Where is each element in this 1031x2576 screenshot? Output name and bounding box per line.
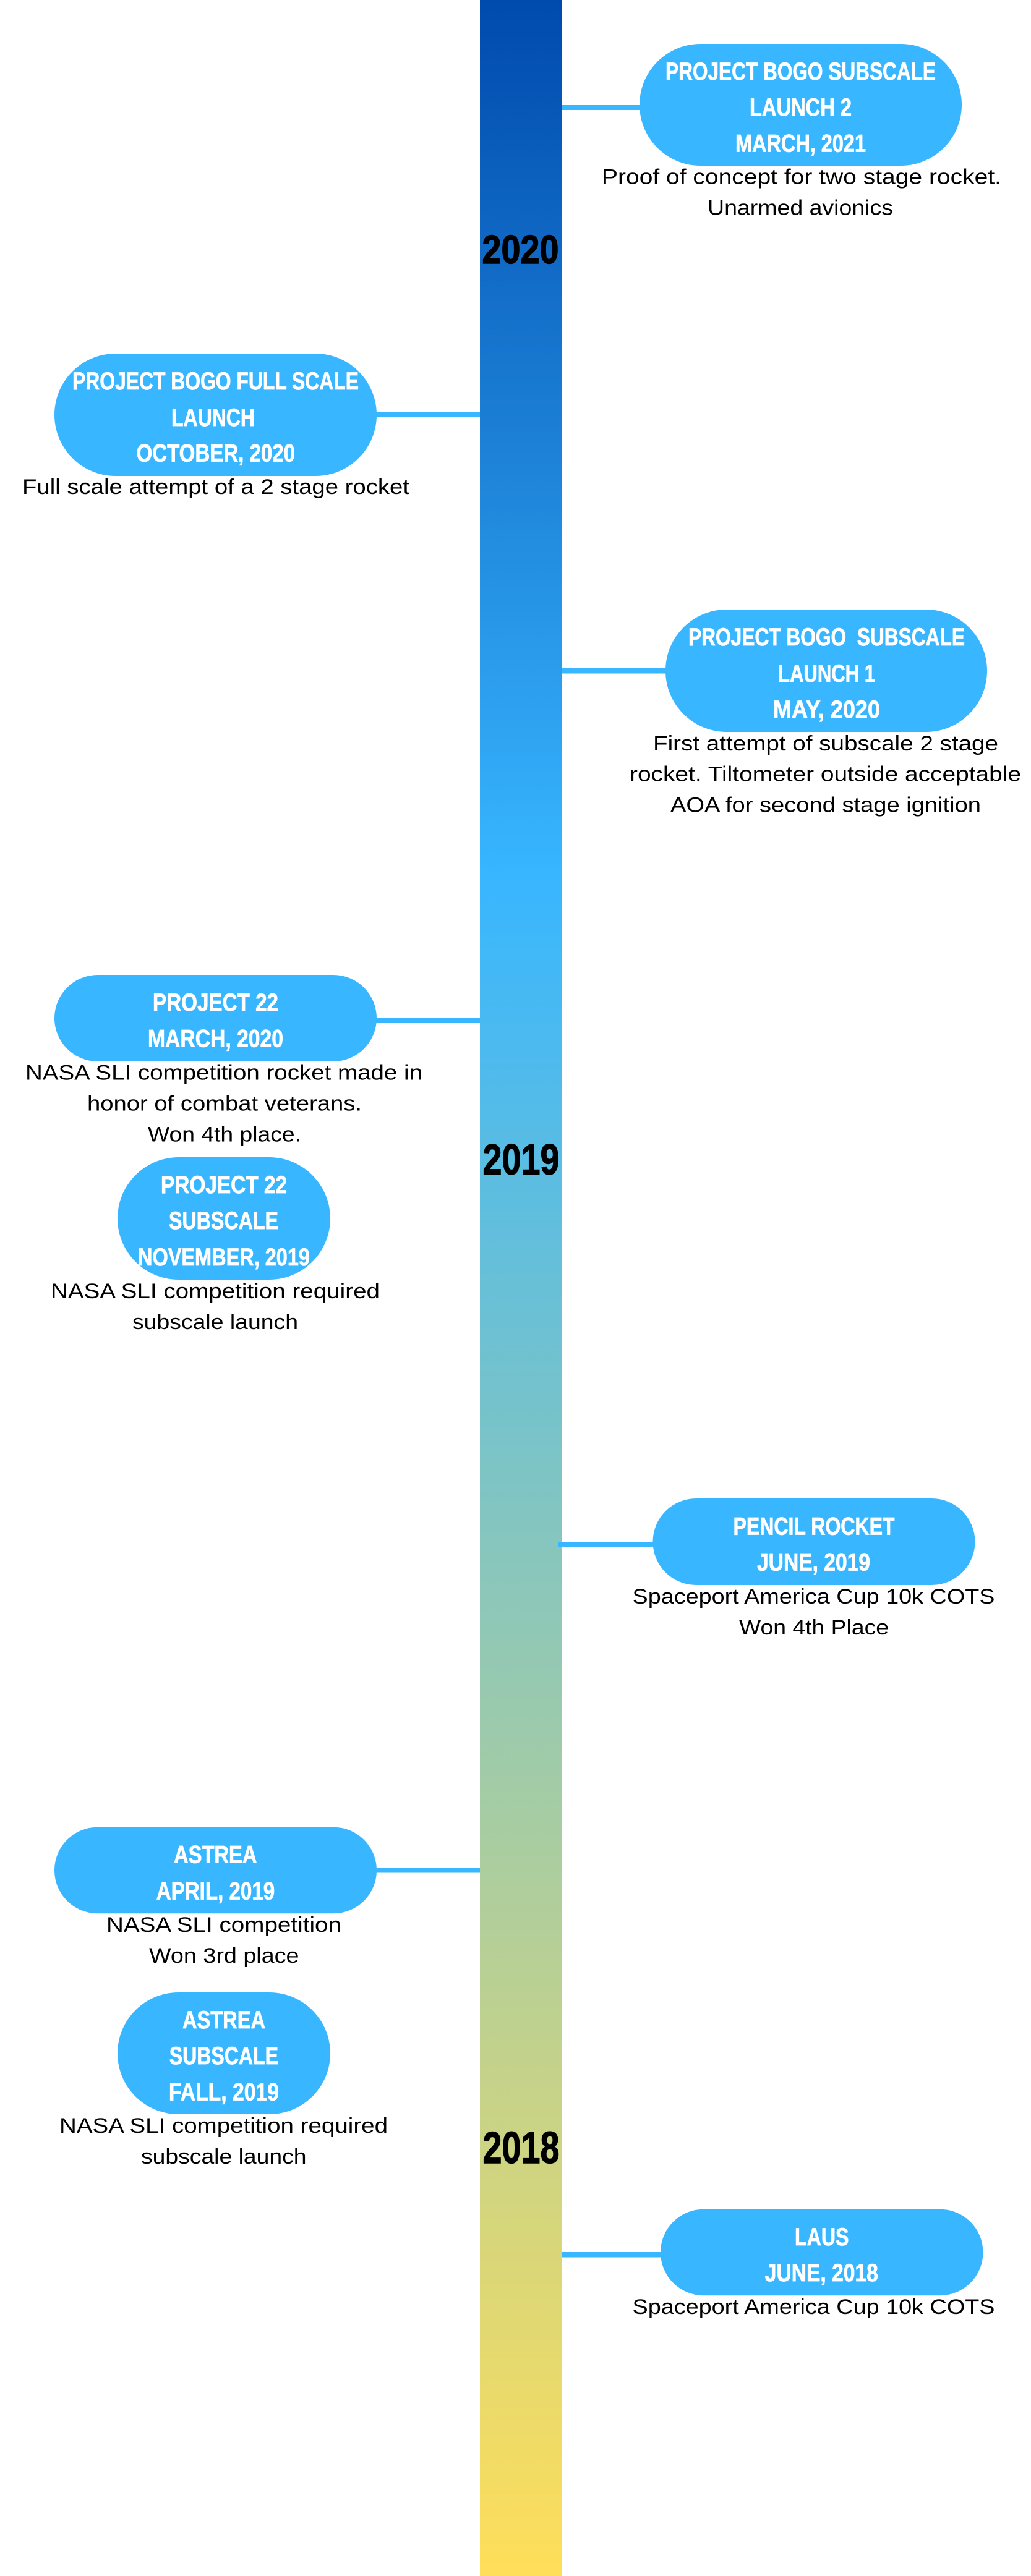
pill bbox=[653, 1498, 975, 1585]
milestone: Astrea Subscale bbox=[59, 1992, 388, 2169]
milestone: Project Bogo Subscale Launch 1 bbox=[562, 610, 1021, 817]
description: honor of combat veterans. bbox=[87, 1092, 362, 1115]
year label 2019: 2019 bbox=[482, 1135, 559, 1183]
year label 2018: 2018 bbox=[482, 2123, 559, 2173]
milestone: Pencil Rocket bbox=[558, 1498, 995, 1639]
pill title: LAUNCH 1 bbox=[778, 660, 875, 687]
pill bbox=[54, 354, 377, 476]
milestone: Project 22 Subscale bbox=[51, 1157, 380, 1334]
description: AOA for second stage ignition bbox=[670, 794, 981, 817]
description bbox=[106, 1913, 341, 1968]
connector bbox=[562, 668, 667, 674]
description: Proof of concept for two stage rocket. bbox=[602, 166, 1001, 189]
description: rocket. Tiltometer outside acceptable bbox=[630, 763, 1021, 786]
description: First attempt of subscale 2 stage bbox=[653, 732, 998, 755]
pill title: JUNE, 2019 bbox=[757, 1549, 870, 1576]
description: NASA SLI competition bbox=[106, 1913, 341, 1937]
description: subscale launch bbox=[141, 2145, 307, 2169]
description: NASA SLI competition required bbox=[51, 1280, 380, 1303]
connector bbox=[375, 1868, 480, 1873]
pill title bbox=[765, 2224, 878, 2287]
pill title: FALL, 2019 bbox=[169, 2079, 279, 2106]
description bbox=[632, 1585, 995, 1639]
description: Won 4th Place bbox=[739, 1616, 889, 1639]
pill title bbox=[138, 1171, 310, 1271]
pill title bbox=[148, 989, 283, 1053]
pill title bbox=[734, 1513, 894, 1576]
pill title bbox=[169, 2007, 279, 2106]
description bbox=[51, 1280, 380, 1334]
connector bbox=[562, 105, 641, 110]
pill title: PROJECT 22 bbox=[161, 1171, 287, 1199]
pill title: SUBSCALE bbox=[169, 1207, 278, 1235]
pill title: LAUS bbox=[795, 2224, 849, 2251]
pill bbox=[661, 2209, 983, 2295]
description bbox=[630, 732, 1021, 817]
pill title: PROJECT BOGO FULL SCALE bbox=[72, 368, 359, 395]
pill bbox=[665, 610, 987, 732]
pill title: NOVEMBER, 2019 bbox=[138, 1244, 310, 1271]
pill bbox=[118, 1157, 330, 1280]
description: Won 3rd place bbox=[149, 1944, 299, 1968]
milestone: Project Bogo Full Scale Launch bbox=[22, 354, 480, 499]
pill title: OCTOBER, 2020 bbox=[136, 440, 295, 467]
description bbox=[25, 1061, 422, 1146]
pill title: JUNE, 2018 bbox=[765, 2259, 878, 2287]
description: Spaceport America Cup 10k COTS bbox=[632, 2295, 995, 2319]
pill title bbox=[156, 1842, 275, 1905]
pill title: ASTREA bbox=[174, 1842, 257, 1869]
pill title: LAUNCH bbox=[171, 404, 255, 431]
milestone: Project 22 bbox=[25, 975, 480, 1146]
pill bbox=[640, 44, 962, 166]
pill title bbox=[665, 58, 936, 158]
pill title: PROJECT 22 bbox=[153, 989, 278, 1016]
connector bbox=[562, 2252, 662, 2258]
connector bbox=[558, 1542, 654, 1547]
pill title: MARCH, 2021 bbox=[735, 130, 866, 158]
milestone: Astrea bbox=[54, 1827, 480, 1968]
description: Unarmed avionics bbox=[708, 197, 893, 220]
milestone: LAUS bbox=[562, 2209, 995, 2319]
description: NASA SLI competition required bbox=[59, 2114, 388, 2138]
connector bbox=[375, 412, 480, 417]
pill title: SUBSCALE bbox=[169, 2043, 278, 2070]
year label 2020: 2020 bbox=[482, 227, 559, 272]
description bbox=[602, 166, 1001, 220]
connector bbox=[375, 1018, 480, 1023]
pill title: PROJECT BOGO SUBSCALE bbox=[665, 58, 936, 85]
description: Won 4th place. bbox=[148, 1123, 301, 1146]
pill title: PENCIL ROCKET bbox=[734, 1513, 894, 1541]
description: NASA SLI competition rocket made in bbox=[25, 1061, 422, 1084]
pill title: MAY, 2020 bbox=[773, 696, 880, 723]
pill title: MARCH, 2020 bbox=[148, 1026, 283, 1053]
description: Full scale attempt of a 2 stage rocket bbox=[22, 475, 410, 499]
pill title bbox=[688, 624, 965, 723]
timeline gradient bar bbox=[480, 0, 562, 2576]
pill bbox=[54, 975, 377, 1061]
pill title: ASTREA bbox=[182, 2007, 265, 2034]
description: subscale launch bbox=[132, 1311, 298, 1334]
pill title: LAUNCH 2 bbox=[750, 94, 852, 121]
pill title: APRIL, 2019 bbox=[156, 1877, 275, 1905]
pill title bbox=[72, 368, 359, 467]
pill title: PROJECT BOGO SUBSCALE bbox=[688, 624, 965, 651]
pill bbox=[54, 1827, 377, 1913]
description bbox=[59, 2114, 388, 2169]
description: Spaceport America Cup 10k COTS bbox=[632, 1585, 995, 1609]
pill bbox=[118, 1992, 330, 2114]
milestone: Project Bogo Subscale Launch 2 bbox=[562, 44, 1001, 220]
